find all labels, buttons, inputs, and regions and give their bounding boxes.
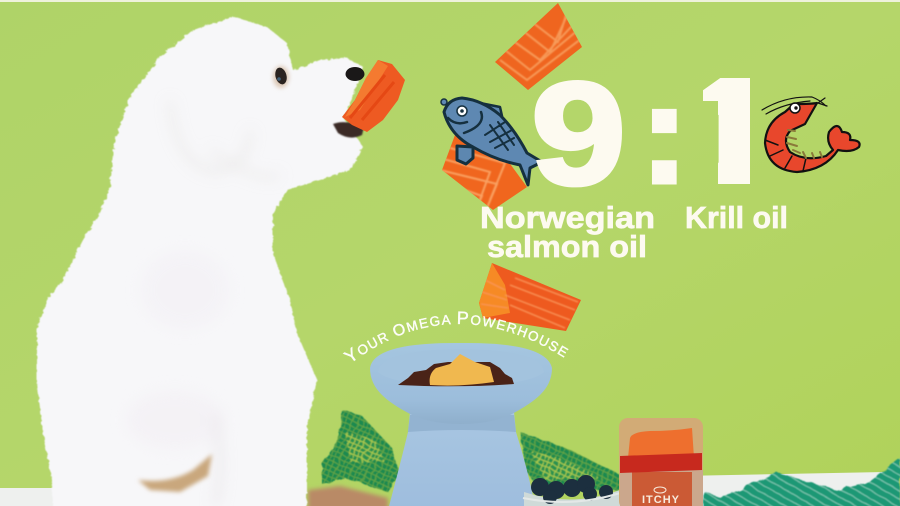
jar label: ITCHY	[642, 494, 680, 506]
digit 1: 1	[694, 50, 770, 218]
colon: :	[641, 55, 688, 212]
dog nose	[346, 67, 364, 81]
jar lower body	[620, 470, 703, 506]
green net: right	[704, 458, 900, 506]
blueberries bowl	[523, 475, 620, 506]
green net: middle	[520, 432, 620, 490]
digit 9: 9	[531, 52, 626, 215]
dog eye	[273, 66, 289, 88]
dog mouth	[333, 122, 364, 138]
shrimp icon	[762, 97, 860, 172]
topping	[430, 354, 494, 386]
dog chest patch	[138, 454, 212, 492]
salmon piece lower	[479, 263, 581, 331]
fur shading	[125, 100, 280, 506]
bowl neck shadow	[408, 415, 516, 432]
jar inner orange	[628, 428, 694, 458]
salmon piece top	[495, 3, 590, 90]
brown blanket	[308, 486, 388, 506]
bowl	[370, 343, 552, 506]
kibble	[398, 362, 514, 386]
fish icon	[441, 98, 542, 185]
dog body	[37, 17, 363, 506]
dog	[37, 17, 364, 506]
label: Krill oil: Krill oil	[685, 200, 788, 235]
green net: left	[322, 410, 400, 492]
bowl rim	[370, 343, 552, 424]
label: Norwegian salmon oil	[480, 200, 655, 264]
supplement jar	[619, 418, 703, 506]
curved caption: YOUR OMEGA POWERHOUSE	[342, 311, 568, 362]
label: Norwegian salmon oil: Norwegian	[480, 200, 655, 235]
salmon in dog's mouth	[342, 60, 405, 132]
ratio 9:1	[534, 78, 750, 188]
label: Norwegian salmon oil: salmon oil	[487, 229, 647, 264]
salmon piece behind fish	[440, 135, 527, 215]
bowl pedestal	[388, 412, 536, 506]
jar red band	[620, 453, 702, 473]
bowl interior	[378, 349, 544, 386]
table surface	[0, 472, 900, 506]
